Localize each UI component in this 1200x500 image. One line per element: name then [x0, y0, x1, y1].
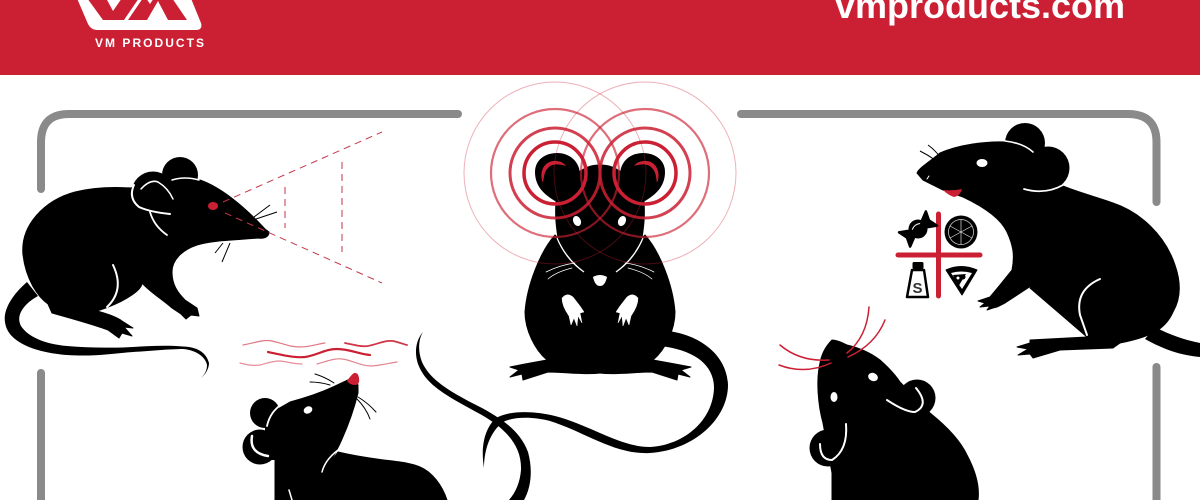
red whiskers: [779, 307, 885, 370]
fur lines: [252, 404, 338, 500]
red nose: [347, 373, 359, 385]
eyes: [867, 371, 879, 383]
hands: [562, 295, 584, 326]
taste grid: [898, 211, 980, 297]
header banner: [0, 0, 1200, 75]
rat: touch (bottom right): [779, 307, 978, 500]
body and head: [510, 165, 691, 380]
whiskers: [215, 205, 277, 262]
body: [23, 175, 269, 338]
icon: candy: [899, 211, 937, 247]
tail: [5, 282, 209, 378]
ears: [1005, 123, 1045, 163]
sight cone: dashed lines and red eye: [208, 132, 382, 283]
icon: citrus slice: [944, 216, 978, 248]
whiskers: [920, 145, 940, 160]
fur and whisker lines: [557, 238, 584, 272]
grey frame: [41, 114, 1156, 500]
white fur lines: [107, 178, 199, 307]
whiskers: [310, 374, 376, 419]
tail: [1145, 327, 1200, 357]
rat: taste (top right): [917, 123, 1200, 358]
ears: [250, 398, 280, 428]
body: [275, 378, 447, 500]
body: [818, 340, 978, 500]
fur lines: [820, 388, 923, 460]
red mouth: [943, 189, 962, 197]
rat: smell (bottom centre): [242, 332, 531, 500]
eye: [302, 405, 314, 415]
icon: pizza slice: [946, 266, 977, 295]
sound rings: [464, 82, 736, 264]
eyes: [571, 215, 583, 227]
fur lines: [927, 141, 1100, 335]
tail of sniffing rat: [416, 332, 531, 500]
ears: [535, 153, 580, 201]
nose: [593, 275, 607, 286]
ears: [810, 430, 846, 466]
rat: hearing (centre): [483, 153, 728, 468]
body: [917, 142, 1179, 358]
tail: [483, 331, 728, 468]
rat: sight (left): [5, 157, 277, 378]
logo: VM Products: [76, 0, 204, 50]
smell waves: [240, 340, 407, 366]
logo: VM Products: VM PRODUCTS: [95, 36, 204, 50]
ears: [162, 157, 198, 193]
icon: salt shaker: S: [912, 280, 923, 297]
cross: [898, 214, 980, 296]
eye: [976, 159, 988, 167]
ear crescents: [541, 161, 566, 183]
